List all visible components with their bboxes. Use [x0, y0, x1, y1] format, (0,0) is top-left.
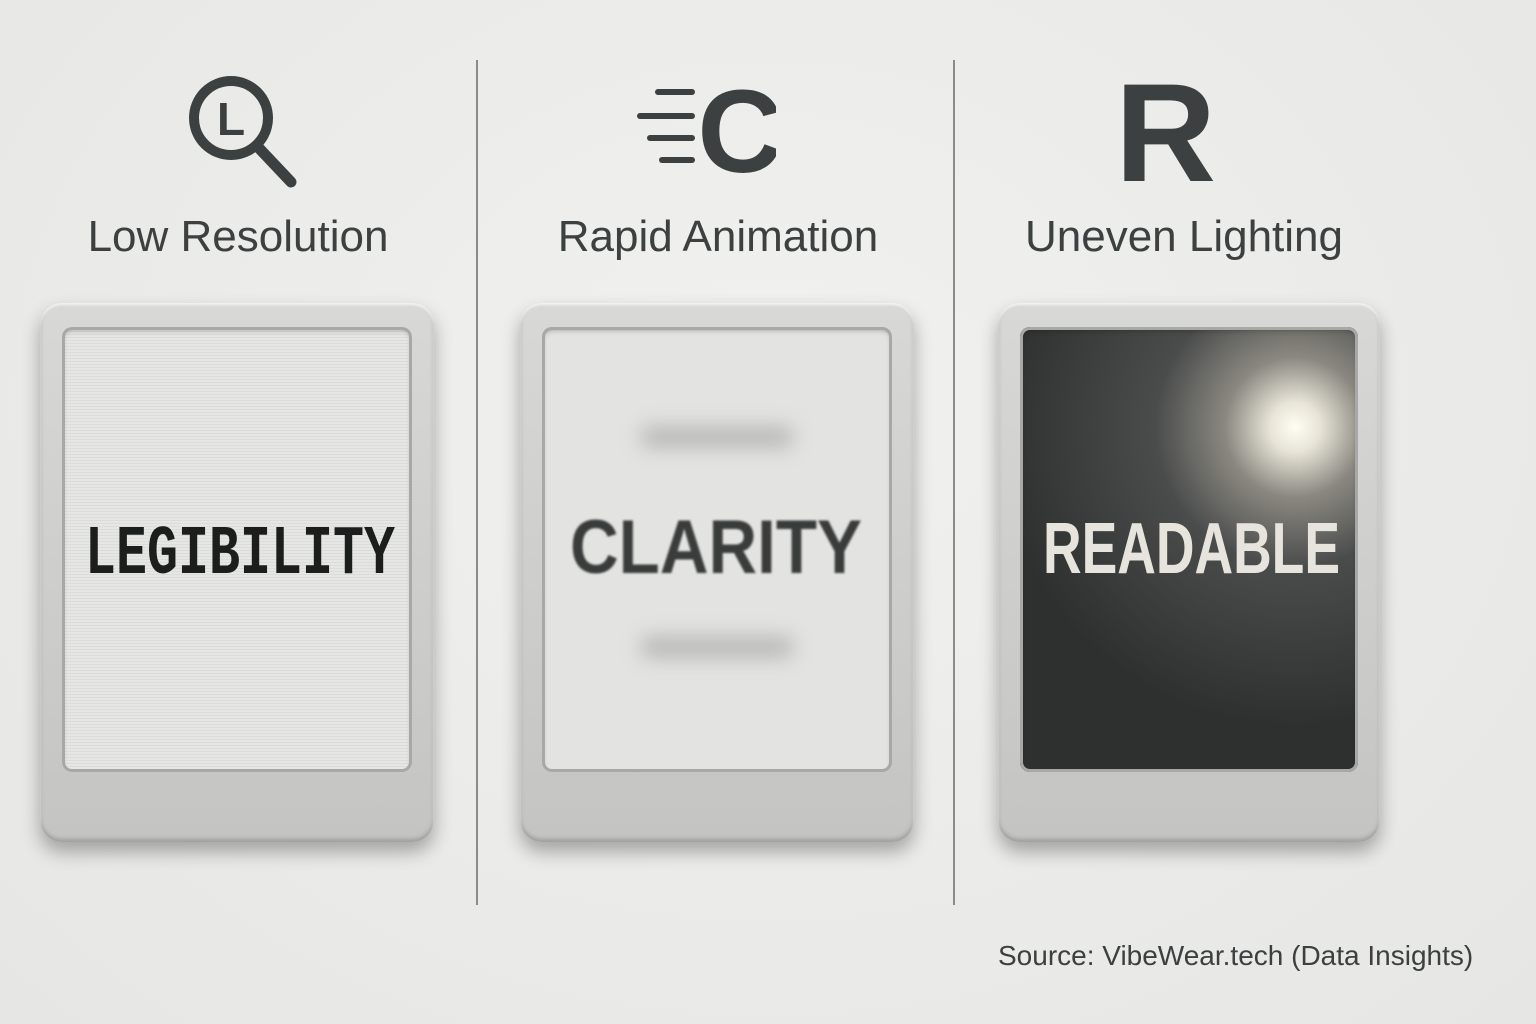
- title: Low Resolution: Low Resolution: [88, 212, 388, 261]
- device: rapid animation: CLARITY: [570, 505, 862, 590]
- icon: speed C: [637, 80, 776, 180]
- device: uneven lighting: [998, 303, 1380, 842]
- icon: magnifier L: L: [217, 93, 245, 145]
- icon: R: R: [1115, 54, 1216, 211]
- title: Uneven Lighting: Uneven Lighting: [1025, 212, 1343, 261]
- device: low resolution: [40, 303, 434, 842]
- device: rapid animation: [520, 303, 914, 842]
- title: Rapid Animation: Rapid Animation: [558, 212, 878, 261]
- source: Source: VibeWear.tech (Data Insights): [998, 940, 1473, 971]
- icon: magnifier L: [189, 76, 296, 188]
